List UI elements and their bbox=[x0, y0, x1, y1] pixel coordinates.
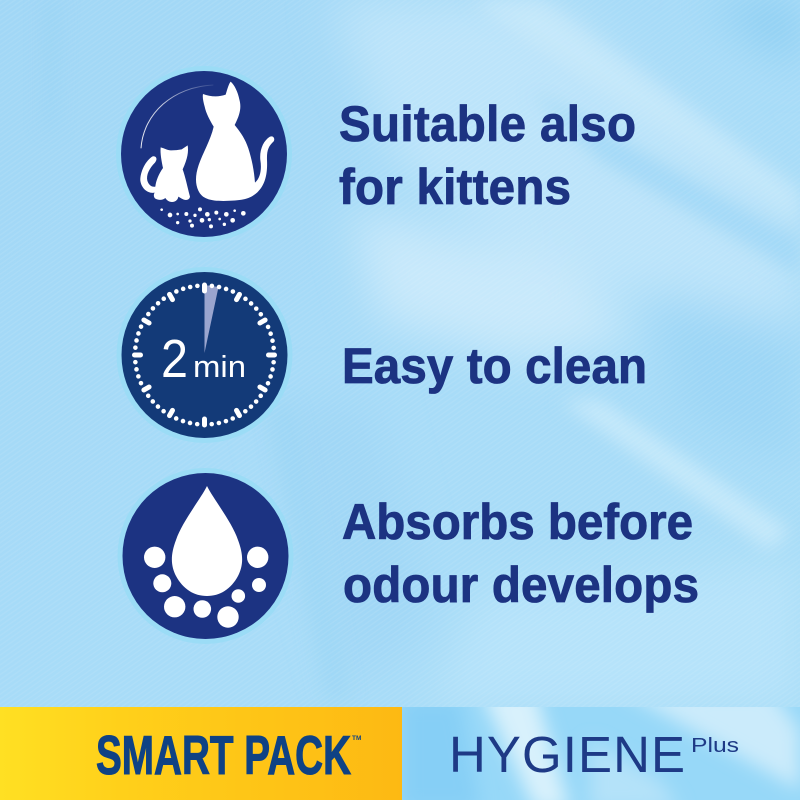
heading: easy to clean: Easy to clean bbox=[342, 339, 647, 394]
kitten bbox=[140, 145, 190, 202]
heading: absorbs before odour develops bbox=[342, 495, 699, 613]
icon: two minute clock bbox=[116, 267, 292, 443]
adult cat bbox=[196, 82, 274, 201]
droplet bbox=[172, 486, 242, 596]
panel: hygiene plus banner bbox=[402, 707, 800, 800]
minute dots bbox=[135, 286, 274, 424]
heading: suitable also for kittens bbox=[339, 97, 636, 215]
heading: suitable also for kittens: Suitable also bbox=[339, 97, 636, 152]
hygiene plus label: HYGIENE bbox=[449, 726, 685, 783]
hygiene plus label: Plus bbox=[691, 735, 739, 757]
icon: cat and kitten bbox=[116, 66, 292, 242]
curved highlight bbox=[141, 85, 213, 148]
smart pack label: SMART PACK bbox=[96, 724, 351, 786]
panel: smart pack banner bbox=[0, 707, 402, 800]
litter granules bbox=[160, 207, 246, 228]
smart pack label: TM bbox=[352, 735, 361, 742]
elapsed time wedge bbox=[204, 285, 218, 353]
absorbed bubbles bbox=[144, 547, 268, 628]
clock label: min bbox=[193, 349, 246, 384]
clock label: 2 bbox=[161, 329, 188, 389]
icon: absorbing droplet bbox=[118, 468, 294, 644]
hour ticks bbox=[134, 285, 274, 425]
clock label bbox=[161, 329, 246, 389]
heading: absorbs before odour develops: Absorbs before bbox=[342, 495, 693, 550]
heading: absorbs before odour develops: odour develops bbox=[343, 558, 699, 613]
heading: suitable also for kittens: for kittens bbox=[339, 160, 571, 215]
